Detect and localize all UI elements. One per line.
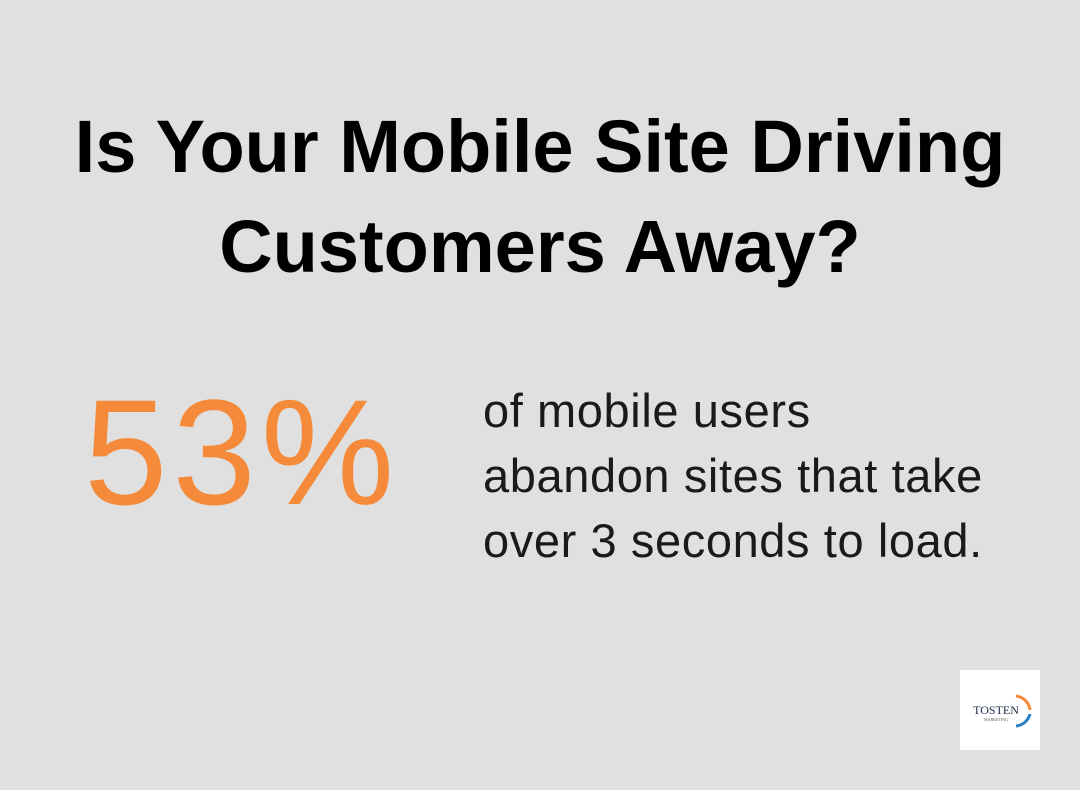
description text: of mobile users xyxy=(483,384,811,437)
description text: abandon sites that take xyxy=(483,449,983,502)
big statistic: 53% xyxy=(84,368,399,536)
logo text: TOSTEN xyxy=(973,703,1019,717)
title: Is Your Mobile Site Driving xyxy=(75,105,1005,188)
title: Customers Away? xyxy=(219,205,861,288)
logo xyxy=(960,670,1040,750)
title xyxy=(75,105,1005,288)
description text xyxy=(483,384,983,567)
icon: logo gear arcs xyxy=(1016,696,1030,726)
description text: over 3 seconds to load. xyxy=(483,514,983,567)
logo text: MARKETING xyxy=(984,717,1008,722)
